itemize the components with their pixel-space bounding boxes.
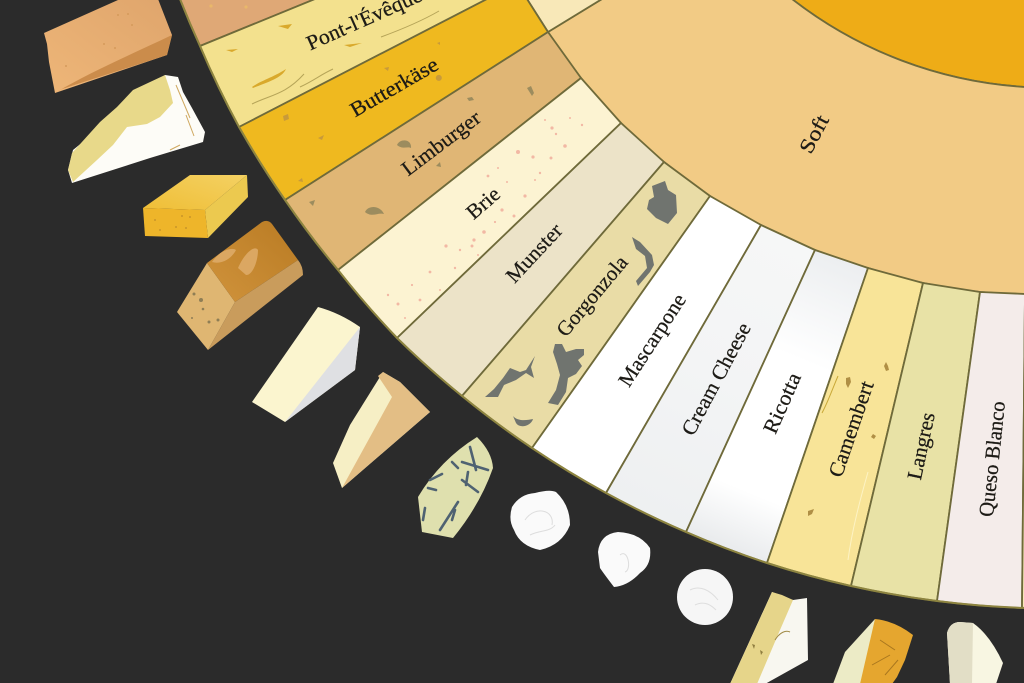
illustration: Munster wedge [252,307,360,422]
wedge: next cheese [1022,294,1024,608]
illustration: Pont-l'Évêque block [44,0,172,93]
wedge: Munster [397,123,664,396]
ring: Soft [548,0,1024,294]
wedge: Queso Blanco [937,292,1024,608]
wedge: Cream Cheese: Cream Cheese [676,319,756,439]
illustration: Brie wedge (Butterkäse column) [68,75,205,183]
wedge: Ricotta: Ricotta [758,368,806,437]
wedge: Camembert: Camembert [823,378,879,480]
wedge: Brie [338,78,621,338]
illustration: Cream Cheese ball [598,532,650,587]
wedge: Queso Blanco: Queso Blanco [974,400,1010,518]
wedge: Limburger: Limburger [397,105,485,181]
outer rim [180,0,1024,608]
illustration: tan wedge [333,372,430,488]
illustration: Mascarpone ball [510,491,570,550]
wedge: Pont-l'Évêque [200,0,487,127]
wedge: Butterkäse: Butterkäse [346,52,442,122]
illustration: Ricotta ball [677,569,733,625]
wedge: Langres [851,283,980,601]
Soft label: Soft [794,111,834,157]
wedge: previous cheese [180,0,315,46]
centre disc [792,0,1024,87]
wedge: Mascarpone: Mascarpone [613,289,691,391]
wedge: Brie: Brie [461,182,505,224]
wheel chart [180,0,1024,608]
illustration: Langres piece [833,619,913,683]
wedge: Limburger [285,32,581,270]
illustration: yellow cheese block [143,175,248,238]
wedge: Ricotta [686,250,868,563]
wedge: Gorgonzola [462,162,710,448]
illustration: Limburger block [177,221,303,350]
wedge: Langres: Langres [902,410,940,482]
illustration: blue cheese [418,437,493,538]
illustration: Queso Blanco piece [947,622,1003,683]
wedge: Camembert [767,268,923,586]
ring: adjacent category [527,0,602,32]
wedge: Munster: Munster [501,218,567,288]
wedge: Cream Cheese [606,225,815,532]
illustration: Camembert wedge [730,592,808,683]
wedge: Mascarpone [532,196,761,493]
wedge: Butterkäse [239,0,548,200]
wedge: Gorgonzola: Gorgonzola [551,250,633,341]
